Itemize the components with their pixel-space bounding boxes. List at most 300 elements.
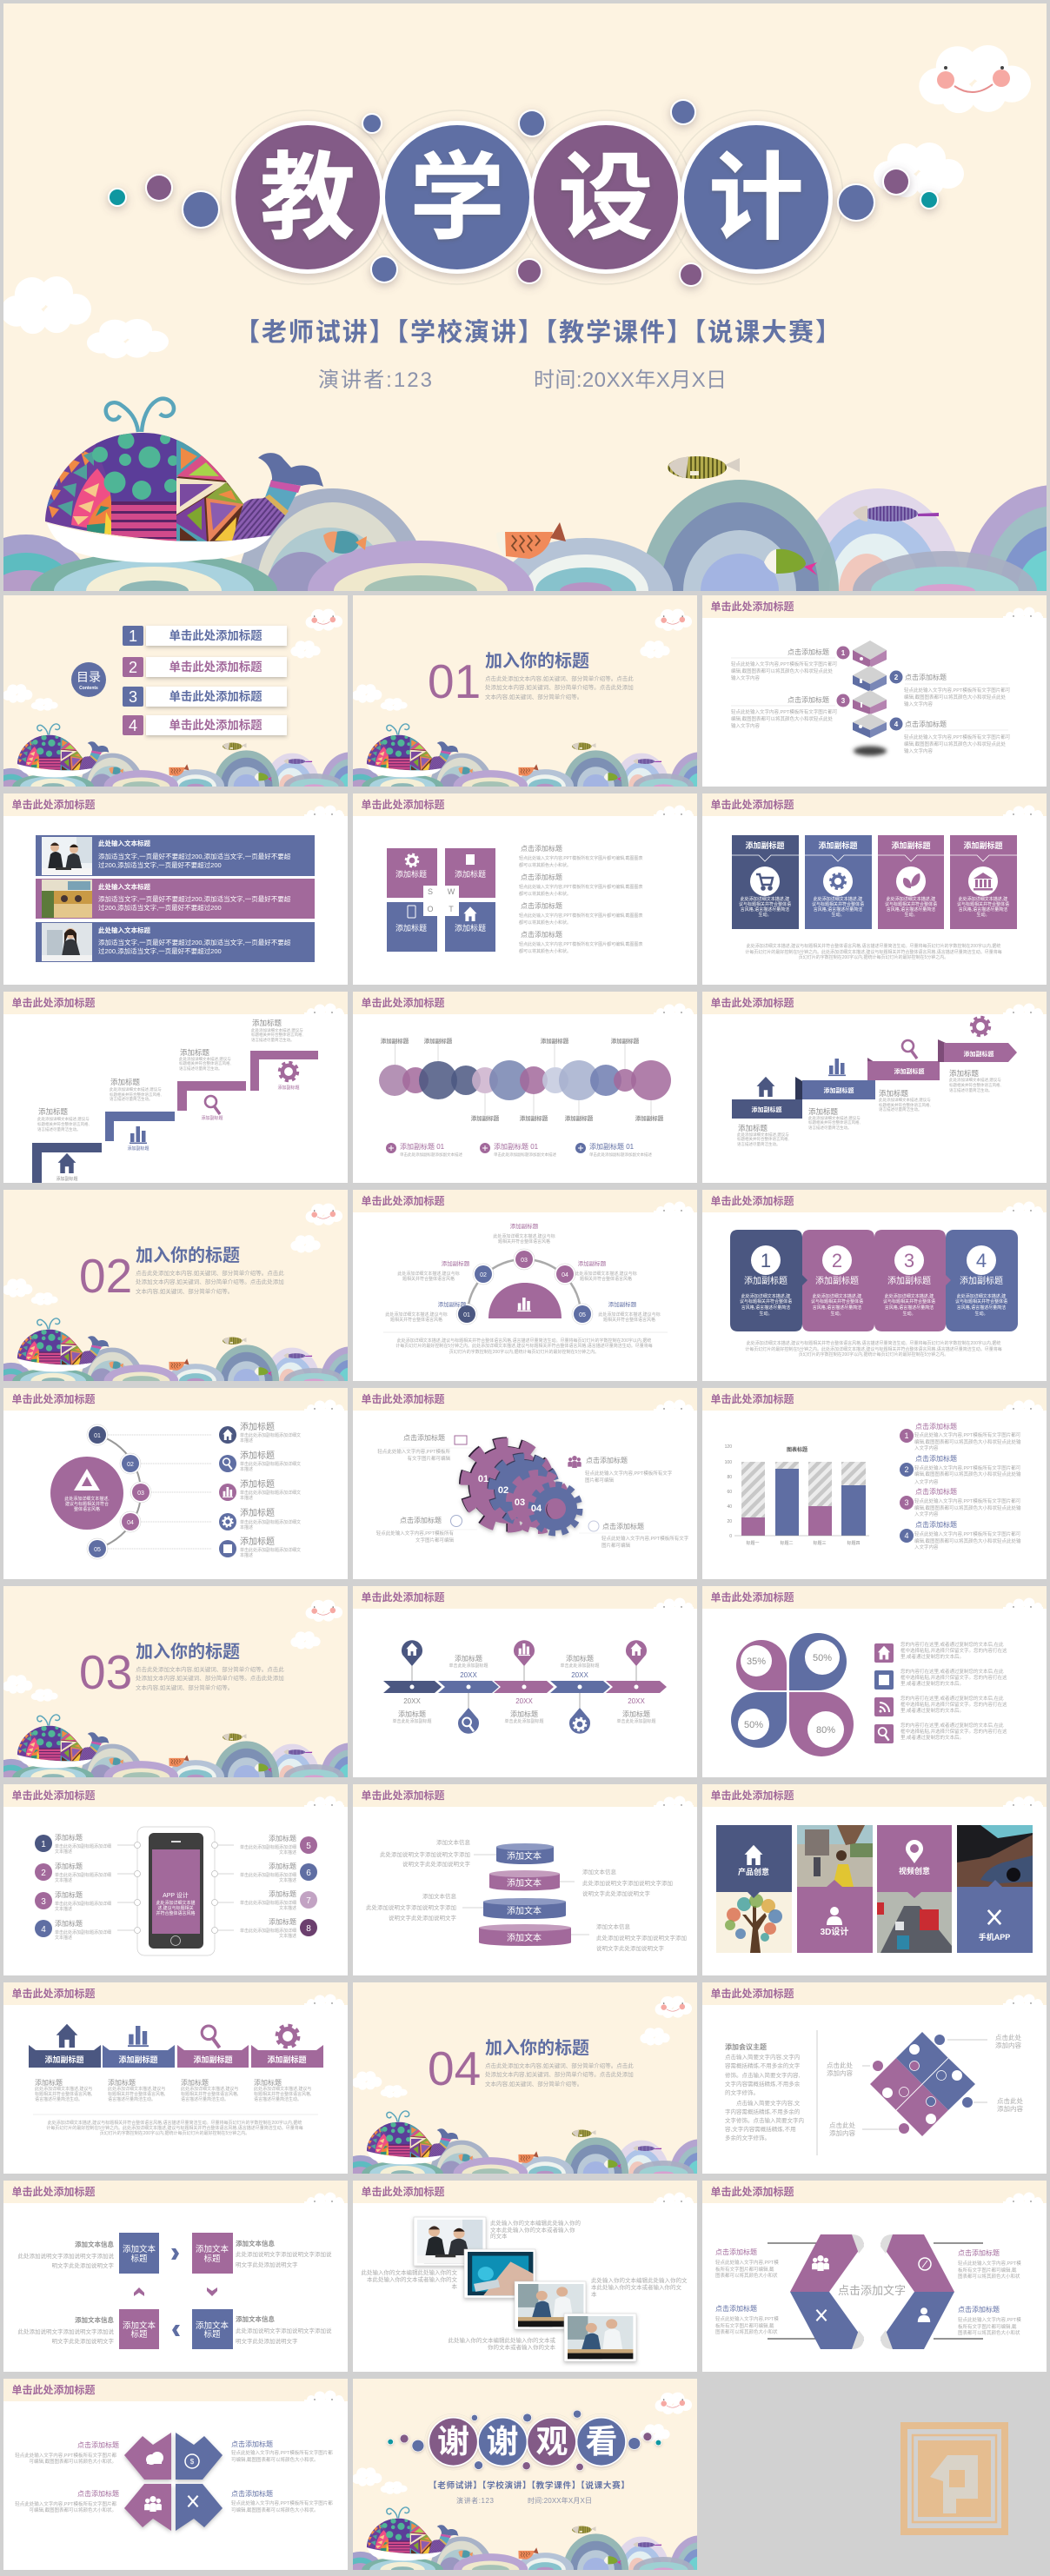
presenter: 演讲者:123 [456,2496,495,2505]
right text 1: 轻点此处输入文字内容,PPT模 [958,2260,1021,2267]
title: 学 [409,145,505,252]
slide title: 单击此处添加标题 [711,1987,794,2000]
main circle [50,1457,123,1530]
timeline labels: 单击此处添加副标题 [560,1663,600,1669]
label 1: 添加文本信息 [436,1838,471,1846]
petal 35%: 35% [747,1656,766,1667]
label top-left: 可编辑,截图图表都可以将颜色大小和状。 [29,2458,116,2465]
bar 2: 过200,添加适当文字,一页最好不要超过200 [98,903,222,912]
item 4: 单击此处添加标题 [169,718,262,732]
slide 15: gears [353,1388,697,1579]
card 4: 生动。 [976,912,990,918]
circle labels: 添加副标题 [381,1037,409,1045]
bar chart: 标题一 [746,1540,760,1546]
card 2 [805,835,872,929]
gear diagram [464,1442,580,1533]
step text 3 [179,1048,231,1072]
timeline labels: 添加标题 [455,1654,482,1663]
step text 4: 此处添加详细文本描述,建议与 [251,1027,303,1033]
timeline labels: 20XX [515,1697,533,1705]
legend 1 [386,1142,462,1158]
column text 2 [108,2078,165,2102]
label 01: 添加副标题 [438,1300,467,1308]
cube stack [853,641,887,738]
card 3 [878,835,944,929]
ribbon 2: 添加副标题 [824,1086,854,1094]
card 3: 议与标题相关并符合整体语 [885,901,937,907]
label 04: 添加副标题 [578,1259,607,1267]
circle labels: 添加副标题 [471,1114,500,1122]
section text: 文本内容,如关键词、部分简单介绍等。 [136,1287,233,1295]
slide 23: four ribbons [3,1982,348,2174]
text 3: 语言描述尽量简洁生动。 [879,1106,921,1112]
legend 3: 单击此处添加副标题添加副文本描述 [589,1152,652,1158]
list row 2: 本描述 [240,1466,253,1472]
slide title: 单击此处添加标题 [711,1194,794,1207]
SWOT grid: 添加标题 [455,923,486,933]
label top-right: 点击添加标题 [231,2440,273,2448]
puzzle labels: 点击此处 [997,2096,1023,2105]
box 2: 此处添加详细文本描述,建 [813,1293,861,1299]
legend item 2: 轻点此处输入文字内容,PPT模板所有文字图片都可 [914,1464,1021,1471]
text block 1: 编辑,截图图表都可以将其颜色大小和状轻点此处 [731,667,834,674]
thank-you title: 谢 [437,2424,469,2460]
slide title: 单击此处添加标题 [362,1789,445,1802]
slide title: 单击此处添加标题 [711,798,794,811]
legend item 4 [900,1520,1021,1550]
date: 时间:20XX年X月X日 [534,368,727,392]
left items: 文本描述 [55,1849,72,1855]
text 1: 标题相关并符合整体语言风格, [737,1136,789,1142]
list row 3 [219,1478,301,1501]
callout top-right [568,1456,673,1484]
text block 2: 轻点此处输入文字内容,PPT模板所有文字图片都可 [904,687,1011,694]
card 3: 言风格,语言描述尽量简洁 [887,906,935,913]
slide 13: numbered rounded boxes [702,1190,1047,1381]
item 1: 单击此处添加标题 [169,628,262,642]
text block 1: 输入文字内容 [731,674,761,681]
footnote: 计每页幻灯片的最好控制在5分钟之内。此处添加详细文本描述,建议与标题相关并符合整体语言风格,语言描述尽量简洁生动。尽量将每 [46,2125,303,2131]
box 2: 2 [832,1250,842,1271]
item 3 [123,687,287,707]
column 1 [716,1825,792,1953]
left items: 添加标题 [55,1862,83,1870]
pin 1 [402,1640,422,1666]
row 1 [874,1641,1007,1663]
label bottom-right: 明文字此处添加说明文字 [236,2337,298,2345]
legend item 2: 点击添加标题 [915,1454,957,1463]
footnote: 页幻灯片的字数控制在200字以内,据统计每页幻灯片的最好控制在5分钟之内。 [449,1349,599,1355]
footnote [745,943,1002,960]
box 1: 议与标题相关并符合整体语 [740,1298,792,1305]
list row 1 [219,1421,301,1444]
hexagon ribbon [790,2234,954,2349]
text block 1: 轻点此处输入文字内容,PPT模板所有文字图片都可 [731,661,838,667]
text list: 轻点此处输入文字内容,PPT模板所有文字图片都可编辑,截图图表 [519,884,643,890]
label top-right [236,2239,332,2268]
row 4: 您的内容打在这里,或者通过复制您的文本后,在此 [900,1722,1004,1729]
timeline labels: 20XX [571,1671,588,1679]
column text 3: 此处添加详细文本描述,建议与 [181,2086,238,2092]
right text 1 [958,2248,1021,2280]
right text 1: 点击添加标题 [958,2248,1000,2257]
box 4: 议与标题相关并符合整体语 [955,1298,1007,1305]
section heading: 加入你的标题 [136,1642,240,1662]
callout bottom-right: 图片都可编辑 [601,1542,631,1549]
card 1 [732,835,799,929]
caption 1 [490,2219,581,2240]
list row 4: 单击此处添加副标题添加详细文 [240,1519,301,1525]
slide title: 单击此处添加标题 [362,996,445,1009]
legend item 1: 轻点此处输入文字内容,PPT模板所有文字图片都可 [914,1431,1021,1438]
gear numbers: 02 [498,1485,508,1496]
text column: 文字修饰。点击输入简要文字内 [725,2116,804,2124]
connectors [117,1842,234,1933]
left items: 文本描述 [55,1877,72,1883]
caption 1: 的文本 [490,2232,508,2240]
label top-left [15,2440,119,2465]
text 1 [737,1124,789,1147]
legend item 2 [900,1454,1021,1485]
left items: 文本描述 [55,1935,72,1941]
callout top-left: 有文字图片都可编辑 [407,1455,450,1462]
slide title: 单击此处添加标题 [12,1789,96,1802]
step text 3: 语言描述尽量简洁生动。 [179,1066,223,1072]
footnote [46,2120,303,2136]
bar chart: 0 [729,1534,732,1539]
numbered nodes: 05 [94,1547,101,1553]
puzzle labels: 添加内容 [995,2041,1021,2049]
legend item 4: 4 [904,1531,909,1540]
right items: 单击此处添加副标题添加详细 [240,1844,296,1850]
list row 4: 添加标题 [240,1507,275,1518]
section text: 点击此处添加文本内容,如关键词、部分简单介绍等。点击此 [136,1665,284,1673]
box 3 [874,1230,951,1331]
list row 1: 添加标题 [240,1421,275,1432]
step text 1: 添加标题 [38,1107,69,1116]
left text 2: 板所有文字图片都可编辑,截 [715,2322,774,2329]
right items: 添加标题 [269,1917,296,1926]
label top-right [231,2440,333,2463]
left items: 单击此处添加副标题添加详细 [55,1872,111,1878]
section text: 文本内容,如关键词、部分简单介绍等。 [485,2080,582,2088]
legend item 1: 点击添加标题 [915,1422,957,1431]
subtitle: 【老师试讲】【学校演讲】【教学课件】【说课大赛】 [429,2480,629,2491]
right text 2: 轻点此处输入文字内容,PPT模 [958,2316,1021,2323]
box 4: 添加副标题 [960,1275,1003,1286]
text 3 [879,1089,931,1112]
text list: 都可以将其颜色大小和状。 [519,920,571,926]
left items: 单击此处添加副标题添加详细 [55,1929,111,1935]
label top-right: 此处添加说明文字添加说明文字添加说 [236,2250,332,2258]
text 3: 添加标题 [879,1089,909,1098]
leader lines [862,2040,987,2129]
left items: 文本描述 [55,1906,72,1912]
box 1: 1 [761,1250,771,1271]
panel: hero cover [0,3,1050,702]
column 4: 手机APP [979,1932,1010,1942]
label 04: 此处添加详细文本描述,建议与标 [575,1271,637,1277]
box 2: 添加副标题 [815,1275,859,1286]
legend item 2: 2 [904,1465,909,1474]
row 4: 框中选择粘贴,并选择只保留文字。您的内容打在这 [900,1728,1007,1735]
item 3: 单击此处添加标题 [169,689,262,703]
slide title: 单击此处添加标题 [12,996,96,1009]
photo 2 [464,2249,535,2298]
box 4: 言风格,语言描述尽量简洁 [957,1305,1006,1311]
circle labels: 添加副标题 [565,1114,594,1122]
box 1: 添加副标题 [744,1275,788,1286]
row 1: 里,或者通过复制您的文本后。 [900,1653,964,1660]
label bottom-right: 此处添加说明文字添加说明文字添加说 [236,2327,332,2334]
ribbon icons [812,2255,931,2322]
slide 6: SWOT [353,793,697,985]
box 3: 议与标题相关并符合整体语 [883,1298,935,1305]
legend item 4: 轻点此处输入文字内容,PPT模板所有文字图片都可 [914,1530,1021,1537]
box 3: 言风格,语言描述尽量简洁 [885,1305,934,1311]
timeline labels: 添加标题 [510,1710,538,1718]
stair 1: 添加副标题 [56,1176,78,1182]
stair 1 [32,1143,102,1183]
timeline labels: 添加标题 [398,1710,426,1718]
box 3: 此处添加详细文本描述,建 [885,1293,934,1299]
bar 2: 添加适当文字,一页最好不要超过200,添加适当文字,一页最好不要超 [98,894,291,903]
slide title: 单击此处添加标题 [12,798,96,811]
row 3: 里,或者通过复制您的文本后。 [900,1707,964,1714]
card 3: 生动。 [904,912,918,918]
bar chart [725,1444,869,1546]
slide 22: image tile grid [702,1784,1047,1975]
legend 1: 添加副标题 01 [400,1142,445,1151]
gear numbers: 01 [478,1474,488,1484]
number markers: 2 [894,674,899,681]
column text 1 [35,2078,92,2102]
section text: 处添加文本内容,如关键词、部分简单介绍等。点击此处添加 [136,1278,284,1285]
text block 4: 点击添加标题 [905,720,947,728]
text list: 都可以将其颜色大小和状。 [519,948,571,954]
list row 4 [219,1507,301,1530]
column text 2: 标题相关并符合整体语言风格, [108,2091,165,2097]
cylinder 1: 添加文本 [507,1850,542,1862]
quad icons: $ [190,2458,195,2466]
title circles [108,99,939,287]
label bottom-left [17,2315,115,2345]
footnote: 此处添加详细文本描述,建议与标题相关并符合整体语言风格,语言描述尽量简洁生动。尽量将每页幻灯片的字数控制在200字以内,据统 [48,2120,302,2126]
illustration [0,1600,381,1814]
slide 19: petal percentages [702,1586,1047,1777]
bar chart: 60 [727,1490,732,1495]
stair 2 [105,1112,175,1152]
text column: 点击输入简要文字内容,文字内 [725,2053,800,2061]
right items: 文本描述 [279,1905,296,1911]
ribbon 2: 添加副标题 [118,2055,158,2064]
number markers: 4 [894,720,899,728]
label bottom-right: 轻点此处输入文字内容,PPT模板所有文字图片都 [231,2500,333,2506]
label bottom-left: 添加文本信息 [75,2315,114,2324]
section text: 处添加文本内容,如关键词、部分简单介绍等。点击此处添加 [485,683,634,691]
row 2 [874,1668,1007,1690]
ribbon 1: 添加副标题 [751,1105,782,1113]
slide 5: three photo bars [3,793,348,985]
slide 28: hexagon ribbon [702,2181,1047,2372]
slide 14: radial list [3,1388,348,1579]
text column: 点击输入简要文字内容,文 [736,2099,801,2107]
SWOT grid [387,848,495,952]
left items [35,1833,111,1941]
item 3: 3 [129,688,137,706]
column text 2: 添加标题 [108,2078,136,2087]
card 4: 议与标题相关并符合整体语 [957,901,1009,907]
ribbon 4: 添加副标题 [267,2055,307,2064]
caption 3: 本此处输入你的文本或者输入你的文 [591,2283,681,2291]
right items: 添加标题 [269,1889,296,1898]
slide title: 单击此处添加标题 [362,1392,445,1405]
bar 1: 此处输入文本标题 [98,839,150,847]
slide title: 单击此处添加标题 [711,1789,794,1802]
text block 2: 输入文字内容 [904,700,934,707]
cube shadow [854,746,887,756]
circle labels: 添加副标题 [424,1037,453,1045]
step text 1: 语言描述尽量简洁生动。 [37,1126,80,1132]
petal 50% top [789,1633,847,1690]
right items [240,1834,317,1939]
right text 2 [958,2305,1021,2336]
label 4: 此处添加说明文字添加说明文字添加 [596,1934,687,1942]
arc nodes: 01 [463,1312,470,1318]
slide 8: stairs [3,992,348,1183]
bar 1 [36,835,315,876]
puzzle labels: 点击此处 [827,2061,853,2069]
numbered nodes: 02 [127,1462,134,1468]
slide 11: section 02 [0,1190,381,1417]
puzzle labels: 添加内容 [997,2104,1023,2113]
callout top-right: 点击添加标题 [586,1456,628,1464]
column 3 [877,1825,952,1953]
section number: 01 [428,654,481,708]
list row 5 [219,1536,301,1558]
left items: 添加标题 [55,1890,83,1899]
left text 1: 板所有文字图片都可编辑,截 [715,2266,774,2273]
number markers: 3 [841,697,846,705]
connectors [462,1855,589,1935]
illustration [339,1996,730,2210]
row 4: 里,或者通过复制您的文本后。 [900,1734,964,1741]
section text: 文本内容,如关键词、部分简单介绍等。 [136,1683,233,1691]
step text 3: 标题相关并符合整体语言风格, [179,1060,231,1066]
legend item 1: 1 [904,1431,909,1440]
right items: 单击此处添加副标题添加详细 [240,1900,296,1906]
ribbon 2 [103,2026,175,2068]
text column: 的文字修饰。 [725,2088,759,2096]
column text 1: 此处添加详细文本描述,建议与 [35,2086,92,2092]
box 1: 言风格,语言描述尽量简洁 [741,1305,790,1311]
text 4: 标题相关并符合整体语言风格, [949,1082,1001,1088]
left text 1: 轻点此处输入文字内容,PPT模 [715,2259,779,2266]
footnote: 计每页幻灯片的最好控制在5分钟之内。此处添加详细文本描述,建议与标题相关并符合整体语言风格,语言描述尽量简洁生动。尽量将每 [745,1346,1002,1352]
legend item 3 [900,1487,1021,1517]
right items: 5 [306,1842,311,1851]
main circle: 建议与标题相关并符合 [65,1501,109,1507]
cylinder 3: 添加文本 [507,1905,542,1916]
label 02: 添加副标题 [442,1259,470,1267]
card 2: 此处添加详细文本描述,建 [814,896,862,902]
step text 3: 此处添加详细文本描述,建议与 [179,1056,231,1062]
footnote: 计每页幻灯片的最好控制在5分钟之内。此处添加详细文本描述,建议与标题相关并符合整体语言风格,语言描述尽量简洁生动。尽量将每 [395,1343,653,1349]
bar chart: 100 [725,1460,732,1465]
text 4 [949,1069,1001,1093]
number markers [836,647,902,730]
text 4: 此处添加详细文本描述,建议与 [949,1077,1001,1083]
timeline labels: 20XX [460,1671,477,1679]
row 2: 里,或者通过复制您的文本后。 [900,1680,964,1687]
slide 2: contents [0,595,381,823]
ribbon 3: 添加副标题 [894,1067,925,1075]
box 3: 添加副标题 [887,1275,931,1286]
ribbon 1: 添加副标题 [44,2055,84,2064]
stems [412,1660,636,1714]
column 2: 3D设计 [821,1926,848,1937]
footnote [745,1340,1002,1358]
timeline labels: 单击此处添加副标题 [449,1663,488,1669]
card 4: 添加副标题 [963,840,1003,850]
label 2 [582,1868,673,1897]
slide 29: quad arrows [3,2379,348,2570]
slide 24: section 04 [339,1982,730,2210]
photo 3 [515,2281,586,2329]
label top-left: 此处添加说明文字添加说明文字添加说 [17,2252,115,2260]
box top-right: 标题 [203,2254,221,2264]
label 04 [575,1259,637,1282]
list row 2: 单击此处添加副标题添加详细文 [240,1461,301,1467]
left text 2 [715,2304,779,2335]
caption 2 [362,2268,457,2290]
right items: 单击此处添加副标题添加详细 [240,1872,296,1878]
text block 3: 轻点此处输入文字内容,PPT模板所有文字图片都可 [731,708,838,715]
column text 4: 此处添加详细文本描述,建议与 [254,2086,311,2092]
SWOT grid: 添加标题 [395,869,427,879]
gear numbers: 03 [515,1497,525,1508]
label bottom-left: 明文字此处添加说明文字 [52,2337,115,2345]
legend item 1: 编辑,截图图表都可以将其颜色大小和状轻点此处输 [914,1438,1021,1445]
label 03: 此处添加详细文本描述,建议与标 [493,1233,555,1239]
circle labels: 添加副标题 [541,1037,569,1045]
text block 1 [731,647,838,681]
column 3: 视频创意 [899,1866,930,1876]
label 01: 题相关并符合整体语言风格 [390,1317,442,1323]
left text 1: 图表都可以将其颜色大小和状 [715,2272,778,2279]
slide title: 单击此处添加标题 [362,1590,445,1603]
bar chart: 40 [727,1504,732,1510]
label 02: 此处添加详细文本描述,建议与标 [397,1271,460,1277]
caption 4 [449,2336,556,2351]
text list: 都可以将其颜色大小和状。 [519,891,571,897]
slide title: 单击此处添加标题 [711,1392,794,1405]
text list: 轻点此处输入文字内容,PPT模板所有文字图片都可编辑,截图图表 [519,913,643,919]
dome [488,1283,562,1318]
step text 2: 标题相关并符合整体语言风格, [110,1092,162,1098]
bar chart: 120 [725,1444,732,1450]
thank-you title: 观 [535,2424,568,2460]
legend item 4: 编辑,截图图表都可以将其颜色大小和状轻点此处输 [914,1537,1021,1544]
gear numbers [478,1474,542,1514]
presenter: 演讲者:123 [318,368,432,392]
list row 5: 添加标题 [240,1536,275,1547]
label bottom-right: 点击添加标题 [231,2489,273,2498]
circle labels: 添加副标题 [611,1037,640,1045]
item 4 [123,715,287,735]
box 2: 生动。 [830,1311,844,1317]
text block 3: 输入文字内容 [731,722,761,729]
